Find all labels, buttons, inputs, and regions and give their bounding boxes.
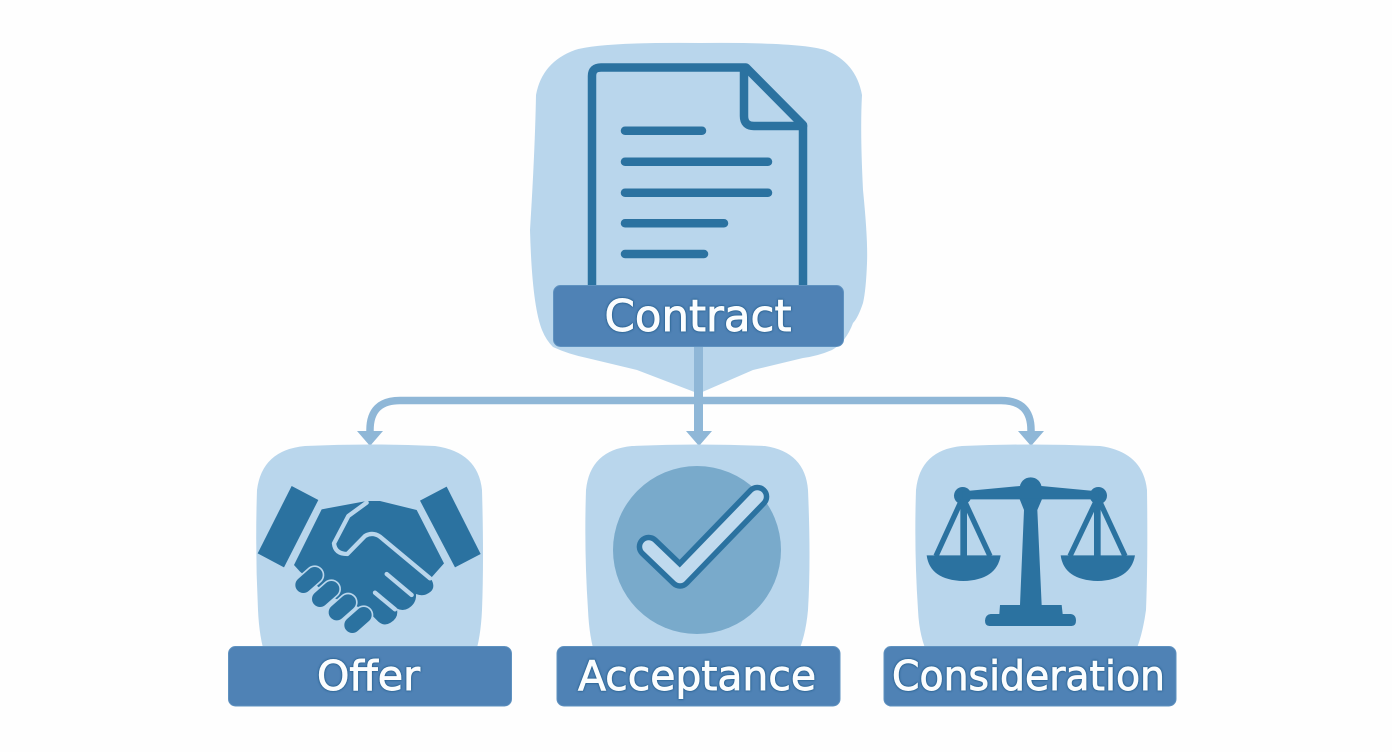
panel: Contract — [530, 43, 867, 393]
panel background: Acceptance — [585, 444, 810, 648]
label: Contract: Contract — [604, 291, 792, 342]
icon: document — [592, 68, 803, 287]
panel: Acceptance — [557, 444, 840, 706]
label: Acceptance — [557, 646, 840, 706]
arrows: connectors from Contract to the three elements — [357, 347, 1044, 446]
panel background: Consideration — [915, 444, 1147, 648]
label: Offer — [228, 646, 512, 706]
label: Acceptance: Acceptance — [578, 652, 816, 700]
icon: check mark in circle — [613, 466, 781, 634]
panel: Offer — [228, 444, 512, 706]
panel background: Contract — [530, 43, 867, 393]
panel background: Offer — [256, 444, 483, 648]
label: Offer: Offer — [317, 652, 420, 700]
icon: handshake — [258, 486, 481, 625]
panel: Consideration — [884, 444, 1176, 706]
label: Contract — [554, 286, 844, 346]
icon: balance scales — [927, 477, 1135, 626]
label: Consideration: Consideration — [892, 652, 1165, 700]
